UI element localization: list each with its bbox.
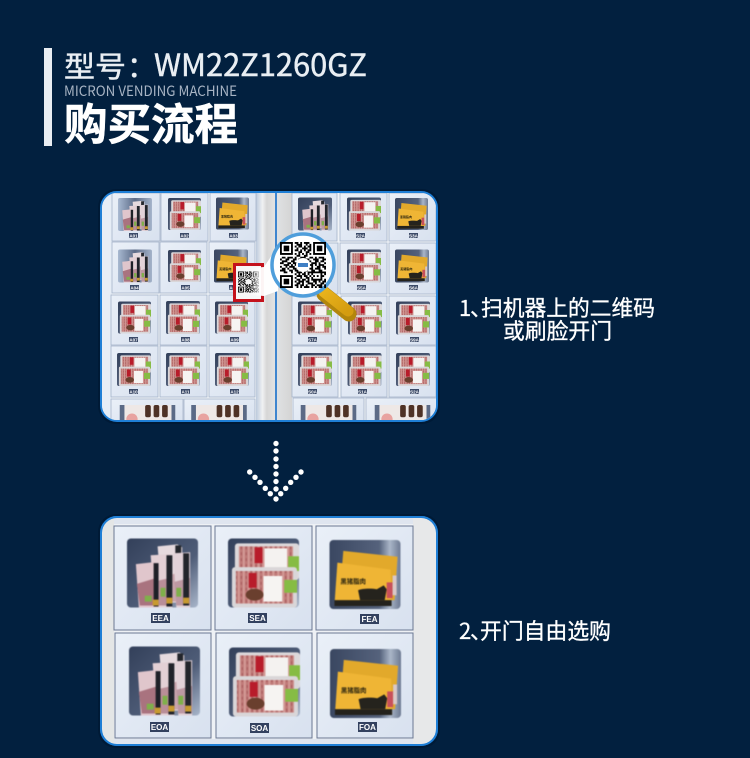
left locker A04 <box>112 242 159 293</box>
right locker B02: S2A <box>356 234 366 238</box>
left locker A09 <box>209 295 255 345</box>
left locker A05: A05 <box>181 286 190 290</box>
step 1 caption: 1 <box>459 291 471 323</box>
locker: meat lower: SOA <box>251 724 268 733</box>
right bottom lockers <box>292 398 436 420</box>
locker: bags upper: EEA <box>152 614 169 623</box>
right locker B08 <box>341 296 387 345</box>
locker: bags lower: EOA <box>151 723 168 732</box>
right locker B09 <box>389 296 436 345</box>
right locker B05: S5A <box>357 286 367 290</box>
left locker A02 <box>161 193 208 241</box>
step 1 caption: 或刷脸开门 <box>503 314 612 346</box>
left locker A06 <box>209 242 255 293</box>
left locker A04: A04 <box>130 286 139 290</box>
left locker A12: A12 <box>230 390 239 394</box>
heading: model number: ： <box>127 44 156 86</box>
locker: yellow lower: FOA <box>359 723 376 732</box>
right locker B02 <box>340 193 387 241</box>
right locker B03 <box>389 193 436 241</box>
left locker A03: A03 <box>229 234 238 238</box>
right locker B10: S0A <box>308 390 318 394</box>
step 2 caption: 、 <box>470 614 492 646</box>
right locker B11 <box>341 346 387 397</box>
step 2 caption: 2 <box>459 614 471 646</box>
right locker B08: S8A <box>357 338 367 342</box>
locker: yellow lower <box>317 633 413 738</box>
locker: bags upper <box>114 526 211 630</box>
right locker B03: S3A <box>409 234 419 238</box>
left locker A12 <box>209 346 255 397</box>
left locker A11: A11 <box>181 390 190 394</box>
left locker A08 <box>160 295 207 345</box>
right locker B07 <box>292 296 338 345</box>
panel: scan QR code on vending machine <box>98 189 440 425</box>
left locker A10 <box>111 346 158 397</box>
right locker B11: S1A <box>358 390 368 394</box>
left locker A07: A07 <box>129 338 138 342</box>
locker: yellow upper <box>316 526 413 630</box>
right locker B09: S9A <box>410 338 420 342</box>
left locker A07 <box>111 295 158 345</box>
locker: meat upper: SEA <box>249 614 266 623</box>
right locker B12 <box>389 346 436 397</box>
right locker B01 <box>292 193 337 241</box>
light beam from QR code to magnifier <box>250 246 278 296</box>
right locker B10 <box>292 346 338 397</box>
subtitle: MICRON VENDING MACHINE <box>64 81 237 101</box>
left locker A05 <box>160 242 207 293</box>
locker: yellow upper: FEA <box>362 615 378 624</box>
right locker B05 <box>340 243 387 294</box>
left locker A09: A09 <box>230 338 239 342</box>
right locker B07: S7A <box>308 338 318 342</box>
right locker B04 <box>326 242 338 294</box>
title: 购买流程 <box>64 90 238 153</box>
left locker A02: A02 <box>180 234 189 238</box>
left locker A01: A01 <box>129 234 138 238</box>
icon: machine QR code in red frame <box>234 264 262 300</box>
left locker A06: A06 <box>229 286 238 290</box>
left locker A08: A08 <box>181 338 190 342</box>
step 1 caption: 扫机器上的二维码 <box>481 291 655 323</box>
left locker A03 <box>210 193 256 241</box>
step 1 caption: 、 <box>470 291 492 323</box>
arrow: dotted down arrow <box>247 441 304 502</box>
left locker A10: A10 <box>129 390 138 394</box>
right locker B12: S2A <box>410 390 420 394</box>
step 1 caption <box>459 291 655 346</box>
left locker A11 <box>160 346 207 397</box>
heading: model number: WM22Z1260GZ <box>154 40 367 85</box>
icon: magnifier with QR code <box>272 234 349 314</box>
heading: model number <box>64 40 367 86</box>
left locker A01 <box>112 193 160 241</box>
left bottom lockers <box>110 398 256 420</box>
right locker B06: S6A <box>409 286 419 290</box>
step 2 caption: 开门自由选购 <box>480 614 611 646</box>
locker: meat lower <box>216 633 312 738</box>
right locker B06 <box>389 243 436 294</box>
heading: model number: 型号 <box>64 44 126 86</box>
locker: bags lower <box>115 633 211 738</box>
locker: meat upper <box>215 526 312 630</box>
header accent bar <box>44 48 52 146</box>
panel: opened lockers close-up <box>98 514 440 748</box>
